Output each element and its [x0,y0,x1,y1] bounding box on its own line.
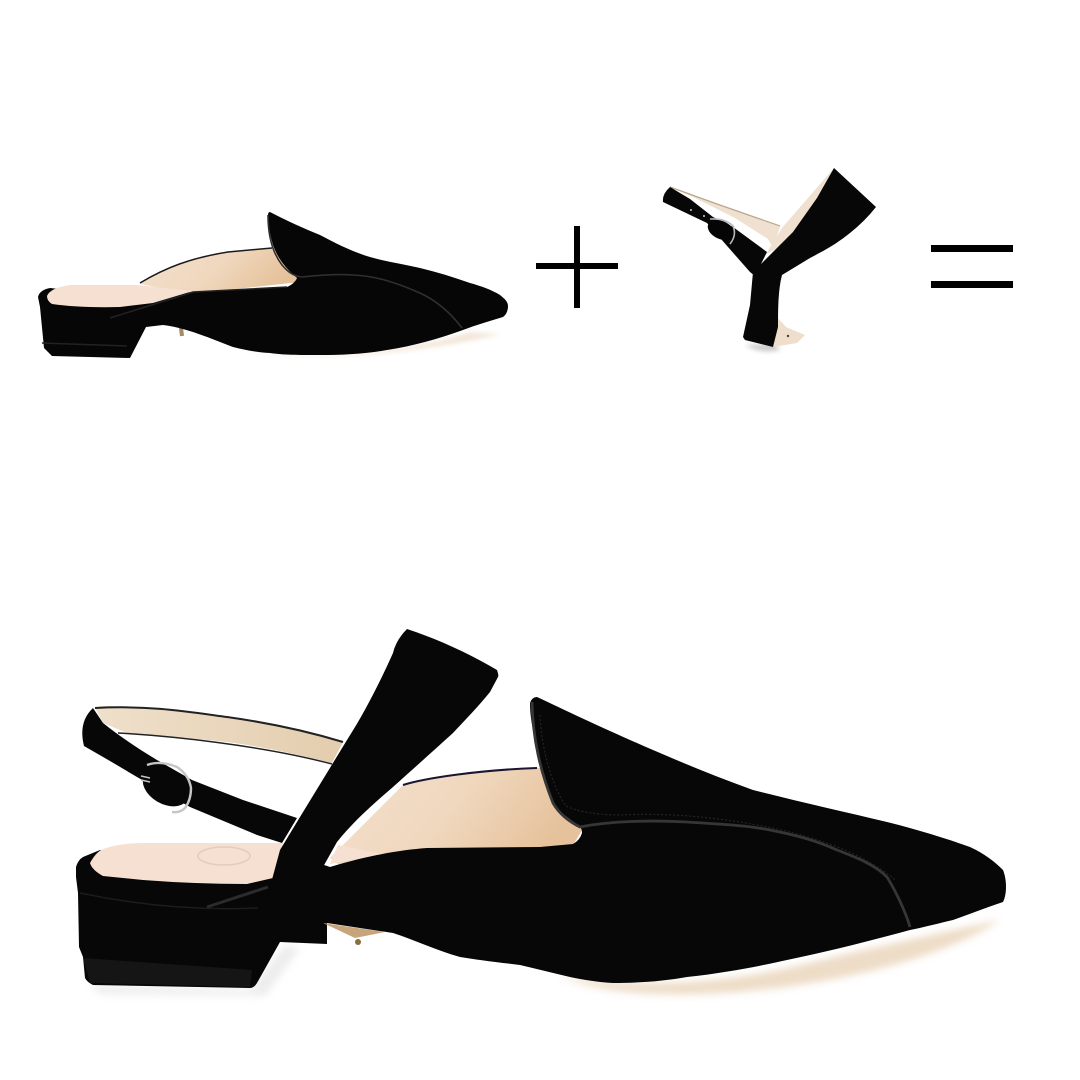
back strap [82,708,297,843]
icon: large combined slingback shoe [76,629,1006,996]
upper and heel [76,697,1006,988]
strap lining band [670,187,780,248]
icon: plus sign [536,226,618,308]
heel sole and rim lines [83,958,252,987]
icon: equals sign [931,245,1013,288]
lining [330,768,582,866]
icon: detachable strap [663,168,876,351]
ankle strap overlay [267,629,498,943]
tongue and vamp piping [532,702,910,927]
small mule insole [47,285,193,307]
icon: small black mule shoe [38,212,508,358]
ground shadow [560,920,1000,994]
back insole [90,843,283,884]
lower strap hardware [323,923,385,938]
buckle [136,760,196,814]
strap lining [95,706,343,763]
